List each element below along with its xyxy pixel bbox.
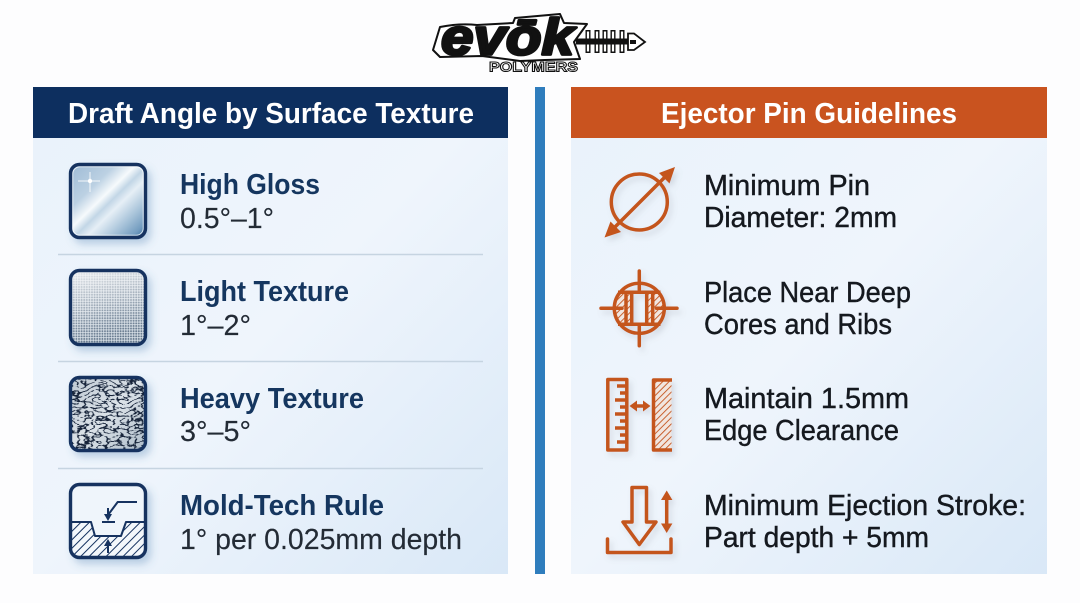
- icon: high gloss: [70, 164, 146, 238]
- text: heavy texture: Heavy Texture: [180, 383, 364, 415]
- heading: ejector pin: [571, 87, 1047, 138]
- heading: draft angle: Draft Angle by Surface Texture: [68, 98, 474, 130]
- text: mold-tech rule: Mold-Tech Rule: [180, 490, 384, 522]
- heading: draft angle: [33, 87, 508, 138]
- text: edge clearance: [704, 383, 909, 447]
- text: deep cores: Place Near Deep: [704, 277, 911, 309]
- icon: pin diameter: [604, 167, 675, 238]
- icon: edge clearance: [608, 380, 672, 450]
- text: deep cores: [704, 277, 911, 341]
- logo wordmark: evōk: [441, 8, 577, 66]
- text: deep cores: Cores and Ribs: [704, 309, 892, 341]
- text: mold-tech rule: 1° per 0.025mm depth: [180, 524, 462, 556]
- text: edge clearance: Edge Clearance: [704, 415, 899, 447]
- icon: ejection stroke: [608, 488, 672, 552]
- center divider: [535, 87, 545, 574]
- logo: evok polymers: [433, 8, 645, 74]
- text: pin diameter: Minimum Pin: [704, 170, 870, 202]
- icon: mold-tech rule: [70, 484, 146, 558]
- text: high gloss: High Gloss: [180, 169, 320, 201]
- text: light texture: 1°–2°: [180, 310, 251, 342]
- text: high gloss: [180, 169, 320, 235]
- logo screw: [576, 30, 645, 53]
- text: pin diameter: Diameter: 2mm: [704, 202, 897, 234]
- text: pin diameter: [704, 170, 897, 234]
- logo subtitle: POLYMERS: [489, 58, 578, 74]
- text: mold-tech rule: [180, 490, 462, 556]
- text: ejection stroke: Part depth + 5mm: [704, 522, 929, 554]
- text: heavy texture: [180, 383, 364, 448]
- text: light texture: Light Texture: [180, 276, 349, 308]
- text: light texture: [180, 276, 349, 342]
- text: ejection stroke: Minimum Ejection Stroke:: [704, 490, 1026, 522]
- icon: heavy texture: [70, 377, 146, 451]
- text: ejection stroke: [704, 490, 1026, 554]
- text: heavy texture: 3°–5°: [180, 416, 251, 448]
- text: high gloss: 0.5°–1°: [180, 203, 274, 235]
- logo outline: [433, 14, 587, 61]
- panel: draft angle by surface texture: [33, 87, 508, 574]
- panel: ejector pin guidelines: [571, 87, 1047, 574]
- heading: ejector pin: Ejector Pin Guidelines: [661, 98, 957, 130]
- icon: light texture: [70, 270, 146, 344]
- text: edge clearance: Maintain 1.5mm: [704, 383, 909, 415]
- icon: deep cores and ribs: [601, 271, 677, 346]
